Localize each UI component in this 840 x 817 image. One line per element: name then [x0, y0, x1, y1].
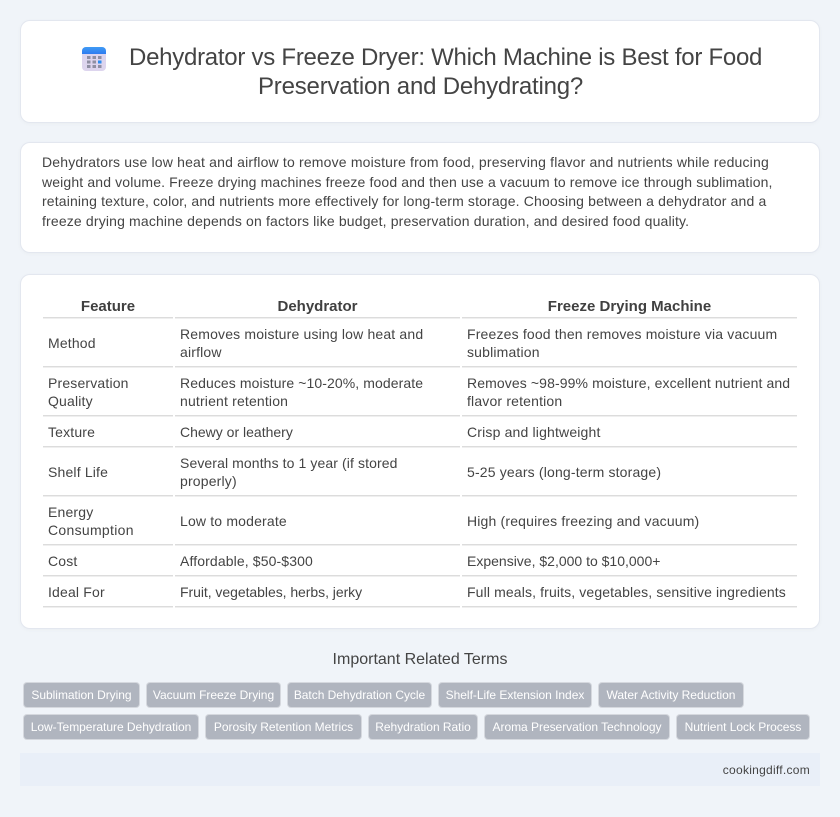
row: shelf life: 5-25 years (long-term storage): [467, 464, 661, 480]
tag: Vacuum Freeze Drying: [153, 688, 274, 702]
tag: [599, 683, 743, 707]
tag: Low-Temperature Dehydration: [31, 720, 191, 734]
title: [129, 44, 762, 100]
row: shelf life: properly): [180, 473, 237, 489]
tag: Shelf-Life Extension Index: [446, 688, 584, 702]
row: ideal for: Ideal For: [48, 584, 105, 600]
row: preservation quality: Quality: [48, 393, 93, 409]
comparison table: [43, 298, 797, 608]
row: ideal for: [48, 584, 786, 600]
tag: [24, 683, 139, 707]
header card: [20, 20, 820, 123]
table panel: [20, 274, 820, 629]
tag: [24, 715, 198, 739]
row: preservation quality: nutrient retention: [180, 393, 288, 409]
row: shelf life: Several months to 1 year (if stored: [180, 455, 398, 471]
row: texture: Crisp and lightweight: [467, 424, 601, 440]
tag: Aroma Preservation Technology: [492, 720, 662, 734]
row: ideal for: Fruit, vegetables, herbs, jerky: [180, 584, 362, 600]
row: preservation quality: [48, 375, 790, 409]
tag: Sublimation Drying: [31, 688, 132, 702]
row: method: Removes moisture using low heat and: [180, 326, 423, 342]
row: texture: [48, 424, 601, 440]
row: preservation quality: Preservation: [48, 375, 129, 391]
intro paragraph: [42, 154, 773, 229]
tag: [288, 683, 431, 707]
footer source: cookingdiff.com: [723, 763, 810, 777]
row: cost: Expensive, $2,000 to $10,000+: [467, 553, 660, 569]
row: preservation quality: flavor retention: [467, 393, 562, 409]
title: Dehydrator vs Freeze Dryer: Which Machine is Best for Food: [129, 44, 762, 71]
row: ideal for: Full meals, fruits, vegetables, sensitive ingredients: [467, 584, 786, 600]
intro card: [20, 142, 820, 253]
table header: Freeze Drying Machine: [548, 298, 711, 315]
tag: [485, 715, 669, 739]
row: energy consumption: Low to moderate: [180, 513, 287, 529]
tag: [147, 683, 280, 707]
intro paragraph: retaining texture, color, and nutrients more effectively for long-term storage. Choosing between a dehydrator and a: [42, 193, 766, 209]
row: energy consumption: Consumption: [48, 522, 134, 538]
tag: [439, 683, 591, 707]
footer bar: [20, 753, 820, 786]
tag: Rehydration Ratio: [375, 720, 471, 734]
row: energy consumption: [48, 504, 699, 538]
intro paragraph: Dehydrators use low heat and airflow to remove moisture from food, preserving flavor and nutrients while reducing: [42, 154, 769, 170]
row: method: airflow: [180, 344, 222, 360]
row: cost: [48, 553, 660, 569]
row: method: Freezes food then removes moisture via vacuum: [467, 326, 777, 342]
row: texture: Chewy or leathery: [180, 424, 293, 440]
tag: [206, 715, 361, 739]
row: cost: Cost: [48, 553, 77, 569]
row: preservation quality: Removes ~98-99% moisture, excellent nutrient and: [467, 375, 790, 391]
row: method: [48, 326, 777, 360]
table header: Feature: [81, 298, 135, 315]
title: Preservation and Dehydrating?: [258, 73, 583, 100]
intro paragraph: weight and volume. Freeze drying machines freeze food and then use a vacuum to remove ice through sublimation,: [42, 174, 773, 190]
row: energy consumption: Energy: [48, 504, 93, 520]
row: shelf life: Shelf Life: [48, 464, 108, 480]
intro paragraph: freeze drying machine depends on factors like budget, preservation duration, and desired food quality.: [42, 213, 689, 229]
row: method: Method: [48, 335, 96, 351]
row: shelf life: [48, 455, 661, 489]
tag: Water Activity Reduction: [607, 688, 735, 702]
related terms heading: Important Related Terms: [333, 651, 507, 668]
table header: [81, 298, 711, 315]
tag: [677, 715, 809, 739]
row: texture: Texture: [48, 424, 95, 440]
tag: Porosity Retention Metrics: [214, 720, 353, 734]
table header: Dehydrator: [277, 298, 358, 315]
row: energy consumption: High (requires freezing and vacuum): [467, 513, 699, 529]
row: cost: Affordable, $50-$300: [180, 553, 313, 569]
row: preservation quality: Reduces moisture ~10-20%, moderate: [180, 375, 423, 391]
related terms tags: [23, 682, 810, 740]
tag: Batch Dehydration Cycle: [294, 688, 425, 702]
row: method: sublimation: [467, 344, 540, 360]
tag: [369, 715, 477, 739]
tag: Nutrient Lock Process: [685, 720, 801, 734]
icon: calendar: [82, 47, 106, 71]
